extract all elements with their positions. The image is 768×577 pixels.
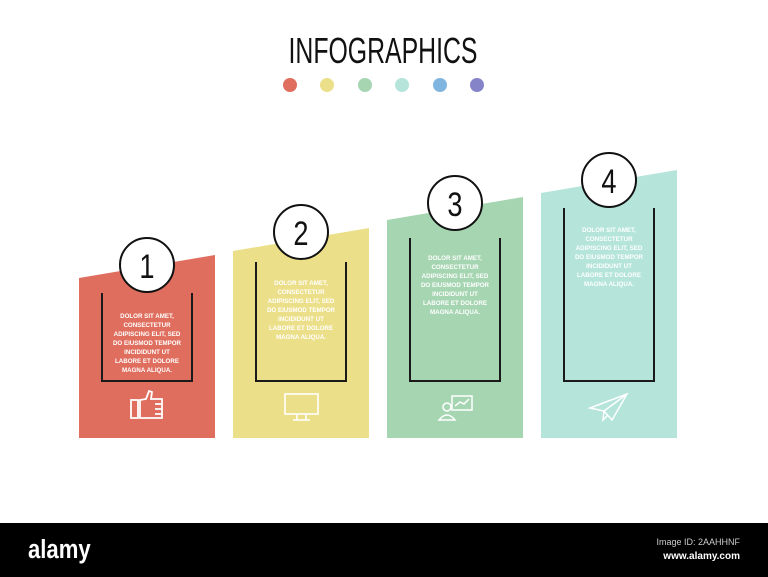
title: INFOGRAPHICS bbox=[289, 30, 477, 71]
text 4: LABORE ET DOLORE bbox=[577, 272, 641, 279]
text 1: ADIPISCING ELIT, SED bbox=[114, 331, 181, 338]
text 4: DOLOR SIT AMET, bbox=[582, 227, 636, 234]
text 3: DO EIUSMOD TEMPOR bbox=[421, 282, 490, 289]
panel 4 bbox=[541, 153, 677, 438]
panel 3 bbox=[387, 176, 523, 438]
text 2: ADIPISCING ELIT, SED bbox=[268, 298, 335, 305]
text 1: LABORE ET DOLORE bbox=[115, 358, 179, 365]
circle number 4 bbox=[582, 153, 636, 207]
text 4: ADIPISCING ELIT, SED bbox=[576, 245, 643, 252]
text 2: LABORE ET DOLORE bbox=[269, 325, 333, 332]
circle number 1 bbox=[120, 238, 174, 292]
text 3: LABORE ET DOLORE bbox=[423, 300, 487, 307]
circle number 3: 3 bbox=[447, 185, 463, 224]
icon: monitor bbox=[285, 394, 318, 420]
text 3 bbox=[421, 255, 490, 316]
footer id bbox=[656, 537, 740, 562]
text 1: MAGNA ALIQUA. bbox=[122, 367, 172, 374]
text 4: MAGNA ALIQUA. bbox=[584, 281, 634, 288]
text 3: MAGNA ALIQUA. bbox=[430, 309, 480, 316]
text 2: DOLOR SIT AMET, bbox=[274, 280, 328, 287]
circle number 1: 1 bbox=[139, 247, 155, 286]
circle number 3 bbox=[428, 176, 482, 230]
panel 2 bbox=[233, 205, 369, 438]
panel 1 bbox=[79, 238, 215, 438]
icon: person with chart bbox=[439, 396, 472, 420]
text 4: INCIDIDUNT UT bbox=[586, 263, 632, 270]
text 2: INCIDIDUNT UT bbox=[278, 316, 324, 323]
text 3: INCIDIDUNT UT bbox=[432, 291, 478, 298]
text 3: CONSECTETUR bbox=[431, 264, 479, 271]
color dots bbox=[283, 78, 484, 92]
circle number 4: 4 bbox=[601, 162, 617, 201]
icon: paper plane bbox=[590, 394, 627, 420]
footer bar bbox=[0, 523, 768, 577]
text 2 bbox=[267, 280, 336, 341]
text 1: CONSECTETUR bbox=[123, 322, 171, 329]
icon: thumbs up bbox=[131, 391, 162, 418]
text 1: DO EIUSMOD TEMPOR bbox=[113, 340, 182, 347]
text 1: INCIDIDUNT UT bbox=[124, 349, 170, 356]
text 4: DO EIUSMOD TEMPOR bbox=[575, 254, 644, 261]
footer logo: alamy bbox=[28, 535, 91, 564]
circle number 2: 2 bbox=[293, 214, 309, 253]
text 2: CONSECTETUR bbox=[277, 289, 325, 296]
circle number 2 bbox=[274, 205, 328, 259]
text 1: DOLOR SIT AMET, bbox=[120, 313, 174, 320]
text 4: CONSECTETUR bbox=[585, 236, 633, 243]
text 2: MAGNA ALIQUA. bbox=[276, 334, 326, 341]
footer id: www.alamy.com bbox=[662, 551, 740, 562]
text 2: DO EIUSMOD TEMPOR bbox=[267, 307, 336, 314]
text 1 bbox=[113, 313, 182, 374]
text 4 bbox=[575, 227, 644, 288]
text 3: ADIPISCING ELIT, SED bbox=[422, 273, 489, 280]
footer id: Image ID: 2AAHHNF bbox=[656, 537, 740, 547]
text 3: DOLOR SIT AMET, bbox=[428, 255, 482, 262]
